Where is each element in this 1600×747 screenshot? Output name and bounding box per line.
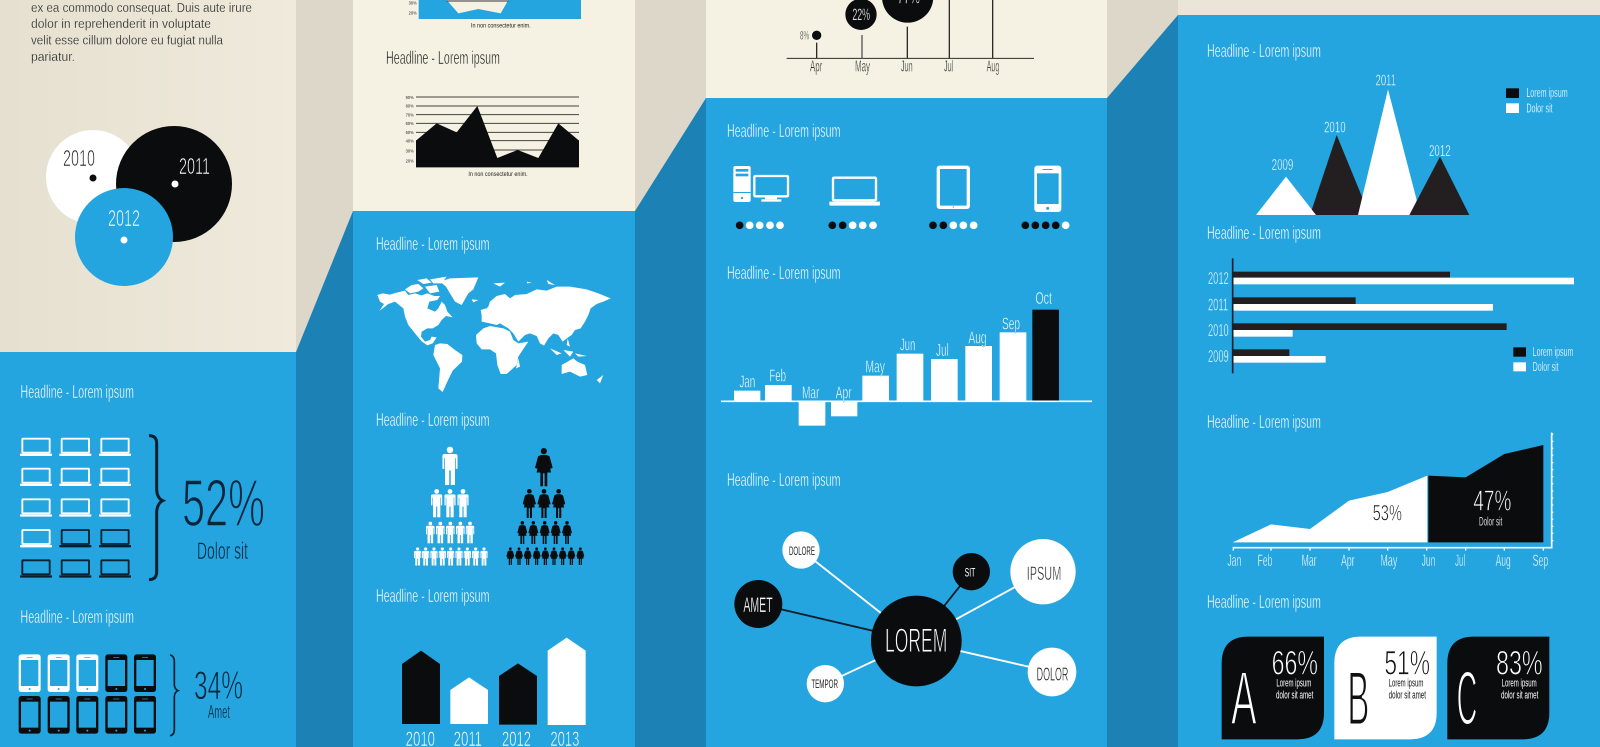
card C: [1447, 637, 1549, 741]
card B: 51%: [1384, 644, 1430, 682]
black area chart: [406, 95, 579, 178]
laptop pictogram grid: [20, 436, 163, 580]
intro text block: velit esse cillum dolore eu fugiat nulla: [31, 32, 224, 48]
lollipop chart (cropped): Aug: [987, 59, 999, 76]
split area chart 53/47: [1227, 433, 1553, 570]
heading: phones: Headline - Lorem ipsum: [20, 607, 134, 627]
network bubble diagram: DOLORE: [789, 544, 815, 558]
triangle chart with legend: [1256, 72, 1568, 215]
horizontal bar chart with legend: 2012: [1208, 268, 1229, 288]
split area chart 53/47: 53%: [1373, 501, 1402, 526]
network bubble diagram: [734, 531, 1076, 702]
heading: monthly bars: Headline - Lorem ipsum: [727, 263, 840, 283]
stat: 34%: 34%: [194, 664, 243, 708]
horizontal bar chart with legend: Dolor sit: [1533, 360, 1559, 374]
horizontal bar chart with legend: 2011: [1208, 295, 1228, 315]
black area chart: 40%: [406, 138, 414, 144]
overlapping year circles: 2011: [179, 153, 210, 179]
intro text block: pariatur.: [31, 49, 75, 64]
pictogram: men pyramid: [414, 447, 488, 566]
triangle chart with legend: 2010: [1324, 119, 1346, 136]
horizontal bar chart with legend: 2010: [1208, 320, 1229, 340]
triangle chart with legend: Lorem ipsum: [1526, 86, 1568, 100]
network bubble diagram: SIT: [965, 566, 976, 580]
card A: 66%: [1272, 644, 1318, 682]
horizontal bar chart with legend: 2009: [1208, 346, 1229, 366]
monthly bar chart: Feb: [769, 365, 786, 385]
icon: laptop: [829, 178, 880, 206]
card B: Lorem ipsum: [1389, 678, 1423, 690]
card A: Lorem ipsum: [1276, 678, 1311, 690]
overlapping year circles: 2010: [63, 145, 95, 171]
lollipop chart (cropped): 8%: [800, 28, 809, 42]
blue area chart (cropped): In non consectetur enim.: [471, 23, 531, 30]
lollipop chart (cropped): Apr: [810, 59, 823, 76]
intro text block: [31, 0, 252, 64]
heading: horizontal bars: Headline - Lorem ipsum: [1207, 223, 1321, 243]
card C: dolor sit amet: [1501, 690, 1538, 702]
black area chart: 30%: [406, 149, 414, 155]
card B: dolor sit amet: [1389, 690, 1426, 702]
triangle chart with legend: Dolor sit: [1526, 102, 1553, 116]
rating dots: [736, 221, 1069, 229]
split area chart 53/47: Feb: [1258, 551, 1272, 570]
ABC stat cards: [1222, 637, 1549, 741]
house-shaped bar chart: [402, 638, 586, 747]
network bubble diagram: LOREM: [885, 622, 947, 660]
monthly bar chart: May: [865, 357, 885, 377]
stat: 34%: Amet: [208, 702, 230, 722]
heading: devices: Headline - Lorem ipsum: [727, 121, 840, 141]
monthly bar chart: Oct: [1035, 288, 1052, 308]
intro text block: dolor in reprehenderit in voluptate: [31, 16, 211, 31]
black area chart: 20%: [406, 159, 414, 165]
stat: 52%: Dolor sit: [197, 538, 248, 565]
network bubble diagram: DOLOR: [1037, 664, 1068, 685]
heading: network: Headline - Lorem ipsum: [727, 470, 840, 490]
heading: split area: Headline - Lorem ipsum: [1207, 412, 1321, 432]
card A: A: [1231, 656, 1257, 741]
icon: smartphone: [1034, 166, 1061, 212]
heading: cards: Headline - Lorem ipsum: [1207, 592, 1321, 612]
panel: column 1: [0, 0, 353, 747]
panel: column 4: [1178, 0, 1600, 747]
card C: 83%: [1496, 644, 1543, 682]
panel: column 2: [353, 0, 706, 747]
lollipop chart (cropped): May: [855, 59, 870, 76]
monthly bar chart: [721, 288, 1092, 426]
phone pictogram grid: [19, 654, 178, 736]
monthly bar chart: Apr: [836, 383, 852, 403]
world map: [377, 277, 611, 392]
card A: dolor sit amet: [1276, 690, 1313, 702]
split area chart 53/47: Dolor sit: [1479, 515, 1503, 529]
triangle chart with legend: 2012: [1429, 143, 1451, 160]
blue area chart (cropped): 30%: [409, 0, 417, 6]
monthly bar chart: Jul: [936, 340, 949, 360]
monthly bar chart: Mar: [802, 383, 819, 403]
card C: Lorem ipsum: [1502, 678, 1537, 690]
lollipop chart (cropped): 22%: [852, 5, 870, 24]
black area chart: In non consectetur enim.: [468, 171, 528, 178]
network bubble diagram: IPSUM: [1027, 563, 1061, 585]
blue area chart (cropped): 20%: [409, 10, 417, 16]
panel: column 3: [706, 0, 1178, 747]
icon: tablet: [938, 167, 968, 208]
lollipop chart (cropped): [787, 0, 1034, 76]
monthly bar chart: Aug: [968, 327, 987, 347]
overlapping year circles: 2012: [108, 205, 140, 231]
split area chart 53/47: Aug: [1496, 551, 1511, 570]
heading: world map: Headline - Lorem ipsum: [376, 234, 490, 254]
monthly bar chart: Sep: [1002, 313, 1020, 333]
black area chart: 50%: [406, 130, 414, 136]
monthly bar chart: Jan: [739, 371, 755, 391]
heading: triangles: Headline - Lorem ipsum: [1207, 41, 1321, 61]
split area chart 53/47: Mar: [1302, 551, 1317, 570]
network bubble diagram: AMET: [743, 594, 773, 617]
heading: black area chart: Headline - Lorem ipsum: [386, 48, 500, 68]
split area chart 53/47: Jul: [1455, 551, 1465, 570]
black area chart: 80%: [406, 104, 414, 110]
split area chart 53/47: Jun: [1422, 551, 1435, 570]
split area chart 53/47: May: [1380, 551, 1398, 570]
triangle chart with legend: 2011: [1376, 72, 1396, 89]
black area chart: 60%: [406, 121, 414, 127]
split area chart 53/47: Jan: [1227, 551, 1241, 570]
card A: [1222, 637, 1324, 741]
split area chart 53/47: Sep: [1533, 551, 1548, 570]
intro text block: ex ea commodo consequat. Duis aute irure: [31, 0, 252, 15]
overlapping year circles: [46, 126, 232, 286]
black area chart: 90%: [406, 95, 414, 101]
monthly bar chart: Jun: [900, 335, 915, 355]
stat: 52%: [182, 466, 265, 565]
heading: population: Headline - Lorem ipsum: [376, 410, 490, 430]
card C: C: [1457, 656, 1477, 741]
icon: desktop computer: [733, 166, 788, 202]
split area chart 53/47: 47%: [1473, 486, 1511, 518]
card B: B: [1347, 656, 1369, 741]
heading: house bars: Headline - Lorem ipsum: [376, 586, 490, 606]
pictogram: women pyramid: [506, 448, 584, 565]
split area chart 53/47: Apr: [1341, 551, 1355, 570]
device icons and rating dots: [733, 166, 1069, 229]
card B: [1334, 637, 1437, 741]
blue area chart (cropped): [409, 0, 581, 30]
stat: 52%: 52%: [182, 466, 265, 541]
horizontal bar chart with legend: [1208, 258, 1574, 374]
heading: laptops: Headline - Lorem ipsum: [20, 382, 134, 402]
triangle chart with legend: 2009: [1272, 157, 1293, 174]
lollipop chart (cropped): Jun: [901, 59, 913, 76]
lollipop chart (cropped): Jul: [944, 59, 953, 76]
stat: 34%: [194, 664, 243, 722]
network bubble diagram: TEMPOR: [811, 677, 838, 691]
black area chart: 70%: [406, 112, 414, 118]
